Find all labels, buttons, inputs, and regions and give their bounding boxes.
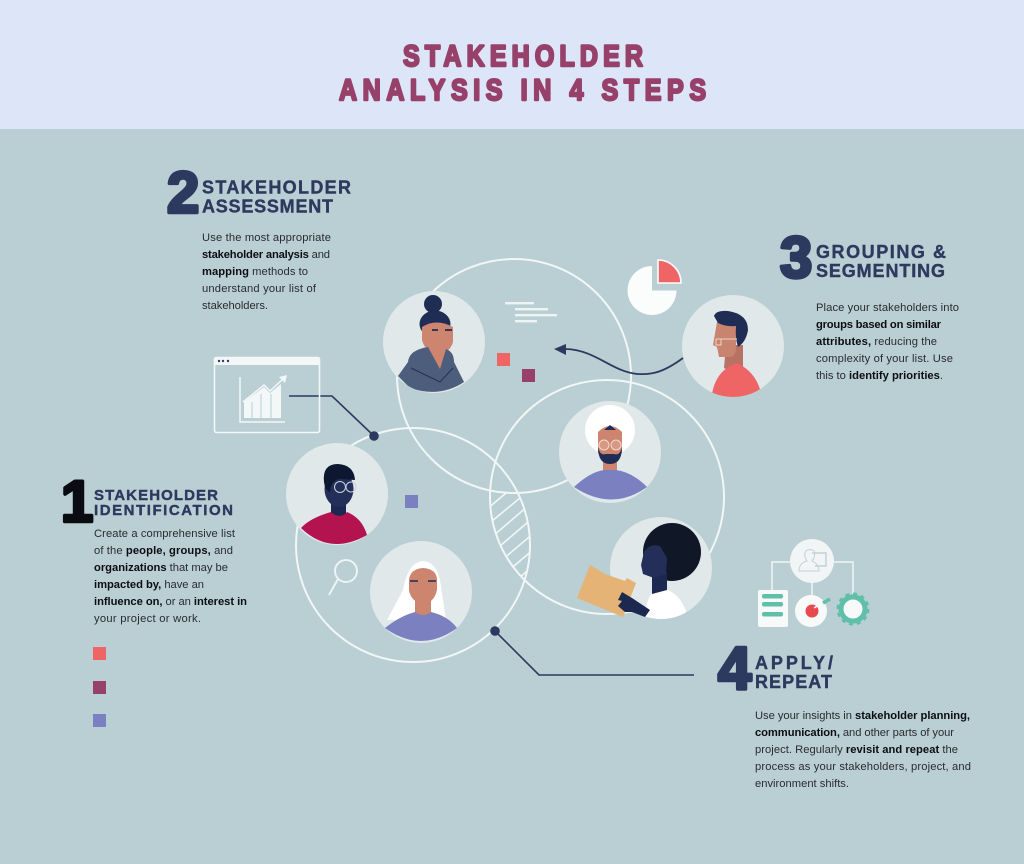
step 1 heading: STAKEHOLDER: [94, 487, 218, 504]
small squares in circles: [405, 353, 535, 508]
step 3 heading: SEGMENTING: [816, 261, 945, 281]
step 3 body text: [816, 302, 959, 382]
step 2 body text: stakeholders.: [202, 300, 268, 312]
step 4 body text: Use your insights in stakeholder planning,: [755, 710, 970, 722]
text lines decoration: [505, 302, 557, 322]
avatar: woman with bun: [383, 291, 485, 393]
step 1 body text: your project or work.: [94, 613, 201, 625]
step 2 heading: [167, 160, 351, 226]
hatched overlap area: [491, 494, 529, 576]
step 1 body text: influence on, or an interest in: [94, 596, 247, 608]
step 3 body text: Place your stakeholders into: [816, 302, 959, 314]
legend squares: [93, 647, 106, 727]
avatar: woman with folder: [577, 517, 712, 625]
header band: [0, 0, 1024, 129]
title: STAKEHOLDER: [403, 39, 643, 73]
step 2 body text: understand your list of: [202, 283, 317, 295]
step 1 heading: [61, 470, 233, 534]
icon: browser window with chart: [214, 357, 320, 432]
connector: circle to step 4: [491, 627, 694, 675]
title: [339, 39, 706, 107]
step 4 heading: REPEAT: [755, 672, 832, 692]
step 1 body text: impacted by, have an: [94, 579, 204, 591]
step 1 body text: organizations that may be: [94, 562, 228, 574]
step 4 heading: [718, 635, 833, 702]
avatar: man in red shirt: [682, 295, 784, 398]
step 3 body text: groups based on similar: [816, 319, 942, 331]
step 3 heading: 3: [780, 226, 812, 290]
step 3 body text: attributes, reducing the: [816, 336, 937, 348]
connector: chart to circle: [289, 396, 378, 440]
icon: magnifying glass: [329, 560, 357, 595]
step 1 body text: Create a comprehensive list: [94, 528, 236, 540]
step 3 heading: [780, 226, 946, 290]
step 4 body text: project. Regularly revisit and repeat the: [755, 744, 958, 756]
step 1 body text: [94, 528, 247, 625]
step 1 heading: IDENTIFICATION: [94, 502, 233, 519]
step 2 heading: STAKEHOLDER: [202, 178, 351, 198]
step 4 body text: communication, and other parts of your: [755, 727, 954, 739]
avatar: person with glasses in crimson shirt: [286, 443, 388, 545]
step 3 body text: this to identify priorities.: [816, 370, 943, 382]
large overlapping circles: [296, 259, 724, 662]
step 4 body text: process as your stakeholders, project, and: [755, 761, 971, 773]
step 4 heading: 4: [718, 635, 752, 702]
step 1 heading: 1: [61, 470, 93, 534]
step 3 body text: complexity of your list. Use: [816, 353, 953, 365]
step 2 body text: mapping methods to: [202, 266, 308, 278]
step 2 body text: stakeholder analysis and: [202, 249, 330, 261]
arrow from person to circle: [554, 344, 683, 374]
step 2 heading: 2: [167, 160, 199, 226]
step 4 body text: environment shifts.: [755, 778, 849, 790]
step 4 body text: [755, 710, 971, 790]
title: ANALYSIS IN 4 STEPS: [339, 73, 706, 107]
step 1 body text: of the people, groups, and: [94, 545, 233, 557]
step 3 heading: GROUPING &: [816, 242, 946, 262]
avatar: woman with white hair: [370, 541, 472, 643]
step 2 body text: [202, 232, 331, 312]
step 2 heading: ASSESSMENT: [202, 196, 333, 216]
icon: pie chart: [628, 260, 681, 315]
step 4 heading: APPLY/: [755, 653, 833, 673]
step 2 body text: Use the most appropriate: [202, 232, 331, 244]
icon: process diagram: [758, 539, 868, 627]
avatar: man with turban: [559, 401, 661, 503]
